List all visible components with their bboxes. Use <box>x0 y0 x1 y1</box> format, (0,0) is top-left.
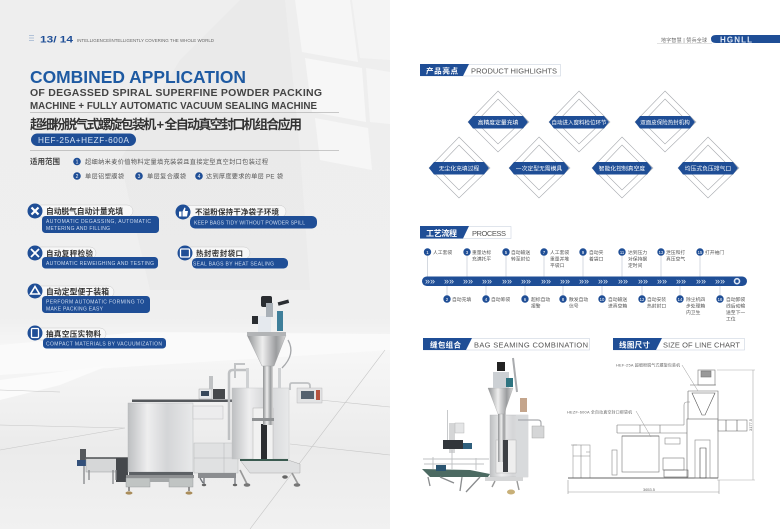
process steps: top row: 人工套袋 <box>433 249 452 256</box>
process steps: bottom row: 内卫生 <box>686 309 701 316</box>
line chart: dimensions drawing <box>568 365 755 494</box>
process steps: bottom row: 16 <box>718 297 723 302</box>
highlight diamond 4: 无尘化充填过程 <box>439 164 479 172</box>
machine: main product photo <box>77 296 322 495</box>
feature: automatic degassing <box>28 204 159 233</box>
process steps: bottom row: 自动筹袋 <box>491 296 510 303</box>
feature: automatic reweighing <box>28 246 158 268</box>
control panels and pipes <box>199 389 212 399</box>
process timeline: »» <box>676 276 686 286</box>
title <box>30 67 322 112</box>
process steps: top row: 9 <box>582 250 585 255</box>
process steps: top row: 5 <box>505 250 508 255</box>
process steps: bottom row: 8 <box>562 297 565 302</box>
process timeline: »» <box>696 276 706 286</box>
process steps: top row: 人工套袋 <box>550 249 569 256</box>
highlight diamond 6 <box>592 137 653 198</box>
heading: product highlights: PRODUCT HIGHLIGHTS <box>471 66 557 76</box>
heading: process: 工艺流程 <box>426 228 457 238</box>
process timeline: »» <box>715 276 725 286</box>
process timeline: »» <box>463 276 473 286</box>
process steps: bottom row: 6 <box>524 297 527 302</box>
highlight diamond 5: 一次定型无需模具 <box>516 164 562 172</box>
process steps: top row: 打开袖门 <box>705 249 724 256</box>
process timeline <box>422 256 747 296</box>
feature: automatic forming: PERFORM AUTOMATIC FORMING TO <box>46 300 144 306</box>
process steps: top row: 自动输送 <box>511 249 530 256</box>
process steps: bottom row: 自动输送 <box>608 296 627 303</box>
process steps: top row: 3 <box>466 250 469 255</box>
heading: size of line chart: SIZE OF LINE CHART <box>663 340 740 350</box>
process steps: bottom row: 进真空箱 <box>608 302 627 310</box>
process steps: top row: 转至封位 <box>511 256 530 262</box>
process timeline: »» <box>579 276 589 286</box>
process steps: bottom row: 10 <box>600 297 605 302</box>
highlight diamond 4 <box>429 137 490 198</box>
brand header: HGNLL <box>720 35 752 44</box>
process steps: top row: 着袋口 <box>589 256 604 262</box>
heading: bag seaming combination <box>423 338 590 350</box>
highlight diamond 3 <box>635 91 696 152</box>
highlight diamond 2 <box>549 91 610 152</box>
process steps: bottom row: 超标自动 <box>531 296 550 303</box>
feature: automatic reweighing: 自动复秤检验 <box>46 248 94 258</box>
process steps: top row: 平袋口 <box>550 262 565 269</box>
process steps: top row: 达到压力 <box>628 249 647 256</box>
process steps: bottom row: 自动充填 <box>452 296 471 303</box>
feature: no powder spill: KEEP BAGS TIDY WITHOUT POWDER SPILL <box>194 220 305 226</box>
chinese title: 超细粉脱气式螺旋包装机 + 全自动真空封口机组合应用 <box>30 117 302 132</box>
applicable scope: 4 <box>198 174 201 180</box>
process steps: bottom row: 散发自动 <box>569 296 588 303</box>
process timeline: »» <box>638 276 648 286</box>
process steps: bottom row: 自动安装 <box>647 296 666 303</box>
page number header: INTELLIGENCE/INTELLIGENTLY COVERING THE WHOLE WORLD <box>77 38 214 43</box>
feature: automatic degassing: 自动脱气自动计量充填 <box>46 206 123 216</box>
feature: vacuum compaction: COMPACT MATERIALS BY VACUUMIZATION <box>46 342 162 348</box>
machine: bag seaming photo <box>422 358 544 494</box>
panel: right background <box>390 0 780 529</box>
weighing platform <box>240 460 300 473</box>
model pill <box>31 134 136 146</box>
model pill: HEF-25A+HEZF-600A <box>38 136 130 145</box>
applicable scope: 超细纳米麦价值物料定量填充装袋且直接定型真空封口包装过程 <box>85 158 268 166</box>
applicable scope: 2 <box>76 174 79 180</box>
forming cabinet <box>132 400 232 402</box>
process timeline: »» <box>444 276 454 286</box>
process steps: bottom row: 报警 <box>531 302 541 310</box>
process steps: bottom row: 4 <box>485 297 488 302</box>
page number header: 13/ 14 <box>40 34 74 46</box>
highlight diamond 3: 双面皮保险热封机构 <box>640 118 690 126</box>
feature: heat sealing <box>178 246 288 268</box>
process timeline: »» <box>657 276 667 286</box>
heading: product highlights <box>420 64 560 76</box>
process steps: bottom row: 线后动输 <box>726 302 745 310</box>
panel: left background <box>0 0 390 529</box>
highlight diamond 2: 自动进入窗料检位环节 <box>551 118 607 126</box>
feature: heat sealing: 热封密封袋口 <box>196 248 243 258</box>
process timeline: »» <box>482 276 492 286</box>
applicable scope: 1 <box>76 160 79 166</box>
heading: size of line chart <box>613 338 744 350</box>
title: COMBINED APPLICATION <box>30 67 246 87</box>
feature: automatic forming <box>28 284 150 313</box>
feature: heat sealing: SEAL BAGS BY HEAT SEALING <box>193 261 274 267</box>
line chart: labels: 3653.5 <box>643 487 655 492</box>
highlight diamond 6: 智能化控制真空度 <box>599 164 645 172</box>
highlight diamond 1 <box>468 91 529 152</box>
packing tower <box>232 388 289 459</box>
conveyor module <box>77 449 128 484</box>
process steps: top row: 1 <box>426 250 429 255</box>
process steps: top row <box>424 248 724 269</box>
process timeline: »» <box>560 276 570 286</box>
applicable scope: 单层铝塑膜袋 <box>85 172 124 180</box>
feature: automatic forming: MAKE PACKING EASY <box>46 306 104 312</box>
title: MACHINE + FULLY AUTOMATIC VACUUM SEALING MACHINE <box>30 100 317 112</box>
process steps: bottom row: 热封封口 <box>647 302 666 310</box>
feature: no powder spill: 不溢粉保持干净袋子环境 <box>195 206 280 216</box>
applicable scope: 适用范围 <box>30 156 60 166</box>
title: OF DEGASSED SPIRAL SUPERFINE POWDER PACKING <box>30 87 322 99</box>
process timeline: »» <box>541 276 551 286</box>
highlight diamond 5 <box>509 137 570 198</box>
process steps: bottom row: 14 <box>678 297 683 302</box>
highlight diamond 7 <box>678 137 739 198</box>
process steps: bottom row: 送至下一 <box>726 309 745 316</box>
feature: automatic forming: 自动定型便于装箱 <box>46 286 109 296</box>
heading: process <box>420 226 511 238</box>
process steps: bottom row: 工位 <box>726 316 736 322</box>
process steps: top row: 11 <box>620 250 625 255</box>
heading: bag seaming combination: BAG SEAMING COMBINATION <box>474 340 588 350</box>
feature: automatic reweighing: AUTOMATIC REWEIGHING AND TESTING <box>46 261 154 267</box>
feature: automatic degassing: AUTOMATIC DEGASSING, AUTOMATIC <box>46 219 151 225</box>
process steps: top row: 自动夹 <box>589 249 604 256</box>
process steps: top row: 13 <box>659 250 664 255</box>
brand header <box>657 35 780 44</box>
process steps: top row: 真压空气 <box>666 256 685 262</box>
process timeline: »» <box>502 276 512 286</box>
process timeline: »» <box>618 276 628 286</box>
process steps: bottom row: 12 <box>640 297 645 302</box>
highlight diamond 7: 均压式负压排气口 <box>685 164 731 172</box>
process steps: top row: 定时间 <box>628 262 643 269</box>
heading: product highlights: 产品亮点 <box>426 66 458 76</box>
process timeline: »» <box>598 276 608 286</box>
feature: vacuum compaction <box>28 326 166 348</box>
process steps: top row: 重量并堆 <box>550 256 569 262</box>
applicable scope <box>30 156 283 180</box>
heading: size of line chart: 线图尺寸 <box>619 340 650 350</box>
process steps: top row: 充满托平 <box>472 256 491 262</box>
line chart: labels: HEF-25A 超细粉脱气式螺旋包装机 <box>616 362 680 368</box>
page number header <box>29 34 214 46</box>
feature: automatic degassing: METERING AND FILLING <box>46 226 110 232</box>
applicable scope: 达到厚度要求的单层 PE 袋 <box>206 172 283 180</box>
process steps: bottom row <box>443 295 745 322</box>
line chart: labels: 3177.5 <box>748 419 753 431</box>
heading: bag seaming combination: 缝包组合 <box>430 340 462 350</box>
process steps: bottom row: 步处理箱 <box>686 302 705 310</box>
process steps: bottom row: 自动卸袋 <box>726 296 745 303</box>
sealing cabinet <box>193 406 223 419</box>
process timeline: »» <box>521 276 531 286</box>
brand header: 地字智慧 | 赞兵全球 <box>661 37 707 44</box>
process steps: top row: 15 <box>698 250 703 255</box>
process steps: top row: 重量达标 <box>472 249 491 256</box>
process steps: top row: 泄压和打 <box>666 249 685 256</box>
process timeline: »» <box>425 276 435 286</box>
feature: no powder spill <box>176 204 317 228</box>
applicable scope: 3 <box>138 174 141 180</box>
highlight diamond 1: 高精度定量充填 <box>478 118 518 126</box>
line chart: labels: HEZF-600A 全自动真空封口绑袋机 <box>567 410 632 414</box>
process steps: bottom row: 除尘机四 <box>686 296 705 303</box>
applicable scope: 单层复合膜袋 <box>147 172 186 180</box>
process steps: top row: 对保持据 <box>628 256 647 262</box>
process steps: top row: 7 <box>543 250 546 255</box>
feature: vacuum compaction: 抽真空压实物料 <box>46 328 102 338</box>
heading: process: PROCESS <box>472 229 506 238</box>
process steps: bottom row: 2 <box>446 297 449 302</box>
line chart: labels <box>567 362 753 492</box>
process steps: bottom row: 信号 <box>569 302 579 310</box>
